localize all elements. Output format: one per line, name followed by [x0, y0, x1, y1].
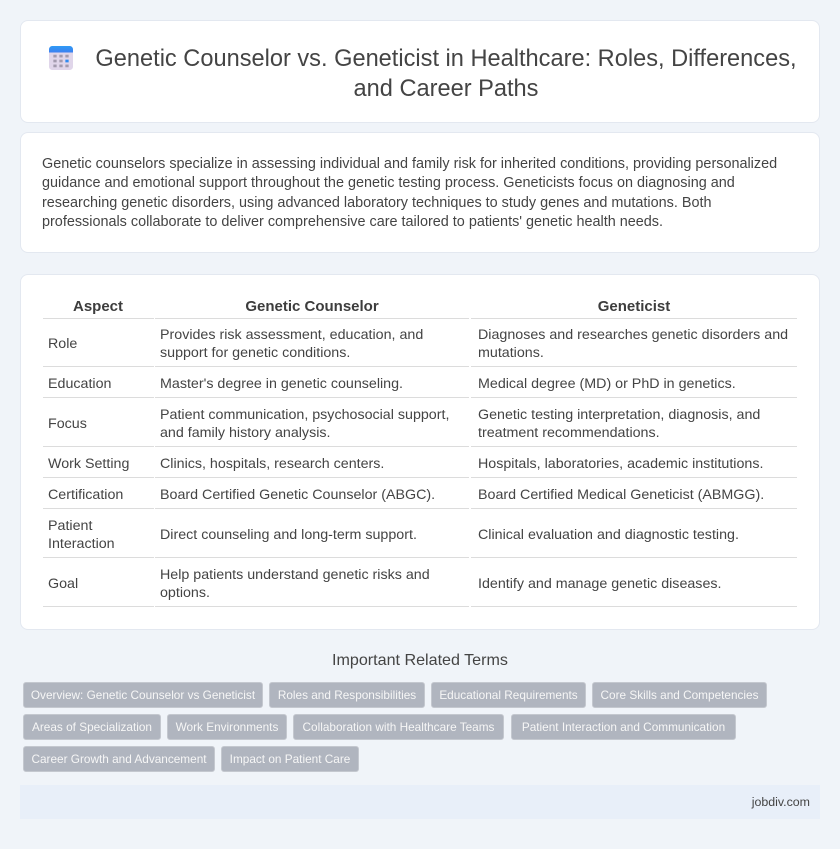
- related terms heading: Important Related Terms: [332, 651, 508, 669]
- related terms tags: Impact on Patient Care: [230, 752, 350, 766]
- table rows: Interaction: [48, 536, 115, 552]
- icon: calendar: [49, 46, 73, 70]
- intro paragraph: Genetic counselors specialize in assessing individual and family risk for inherited conditions, providing personalized: [42, 156, 777, 172]
- intro paragraph: guidance and emotional support throughout the genetic testing process. Geneticists focus on diagnosing and: [42, 175, 735, 191]
- related terms tags: Career Growth and Advancement: [31, 752, 207, 766]
- table rows: Genetic testing interpretation, diagnosis, and: [478, 407, 760, 423]
- table rows: Goal: [48, 576, 78, 592]
- table rows: Master's degree in genetic counseling.: [160, 376, 403, 392]
- table rows: Board Certified Medical Geneticist (ABMGG).: [478, 487, 764, 503]
- table rows: Education: [48, 376, 111, 392]
- table rows: Hospitals, laboratories, academic institutions.: [478, 456, 763, 472]
- table rows: Board Certified Genetic Counselor (ABGC).: [160, 487, 435, 503]
- table rows: Medical degree (MD) or PhD in genetics.: [478, 376, 736, 392]
- table rows: Help patients understand genetic risks and: [160, 567, 430, 583]
- title: and Career Paths: [354, 76, 538, 102]
- related terms tags: Overview: Genetic Counselor vs Geneticist: [31, 688, 255, 702]
- comparison table panel: [20, 274, 820, 630]
- table rows: Direct counseling and long-term support.: [160, 527, 417, 543]
- title: [95, 46, 797, 102]
- column headers: Aspect: [73, 298, 123, 315]
- table rows: Provides risk assessment, education, and: [160, 327, 423, 343]
- related terms tags: Work Environments: [176, 720, 278, 734]
- table rows: and family history analysis.: [160, 425, 330, 441]
- related terms tags: Core Skills and Competencies: [600, 688, 759, 702]
- footer bar: [20, 785, 820, 819]
- related terms tags: Collaboration with Healthcare Teams: [303, 720, 494, 734]
- column headers: [73, 298, 670, 315]
- table rows: Clinics, hospitals, research centers.: [160, 456, 384, 472]
- intro paragraph: [42, 156, 777, 230]
- table rows: [43, 318, 797, 607]
- table rows: Certification: [48, 487, 123, 503]
- related terms tags: Roles and Responsibilities: [278, 688, 416, 702]
- intro text panel: [20, 132, 820, 253]
- table rows: treatment recommendations.: [478, 425, 660, 441]
- table rows: Identify and manage genetic diseases.: [478, 576, 721, 592]
- table rows: support for genetic conditions.: [160, 345, 350, 361]
- table rows: Patient communication, psychosocial support,: [160, 407, 449, 423]
- related terms tags: Educational Requirements: [439, 688, 578, 702]
- title: Genetic Counselor vs. Geneticist in Healthcare: Roles, Differences,: [95, 46, 797, 72]
- table rows: Diagnoses and researches genetic disorders and: [478, 327, 788, 343]
- header card: [20, 20, 820, 123]
- table rows: options.: [160, 585, 210, 601]
- table rows: Focus: [48, 416, 87, 432]
- table rows: Role: [48, 336, 77, 352]
- table rows: mutations.: [478, 345, 544, 361]
- table rows: Patient: [48, 518, 92, 534]
- intro paragraph: professionals collaborate to deliver comprehensive care tailored to patients' genetic health needs.: [42, 214, 663, 230]
- related terms tags: Patient Interaction and Communication: [522, 720, 725, 734]
- column headers: Genetic Counselor: [245, 298, 379, 315]
- table rows: Clinical evaluation and diagnostic testing.: [478, 527, 739, 543]
- related terms tags: Areas of Specialization: [32, 720, 152, 734]
- table rows: Work Setting: [48, 456, 129, 472]
- column headers: Geneticist: [598, 298, 670, 315]
- related terms tags: [23, 682, 767, 772]
- intro paragraph: researching genetic disorders, using advanced laboratory techniques to study genes and mutations. Both: [42, 195, 712, 211]
- footer source: jobdiv.com: [752, 795, 810, 809]
